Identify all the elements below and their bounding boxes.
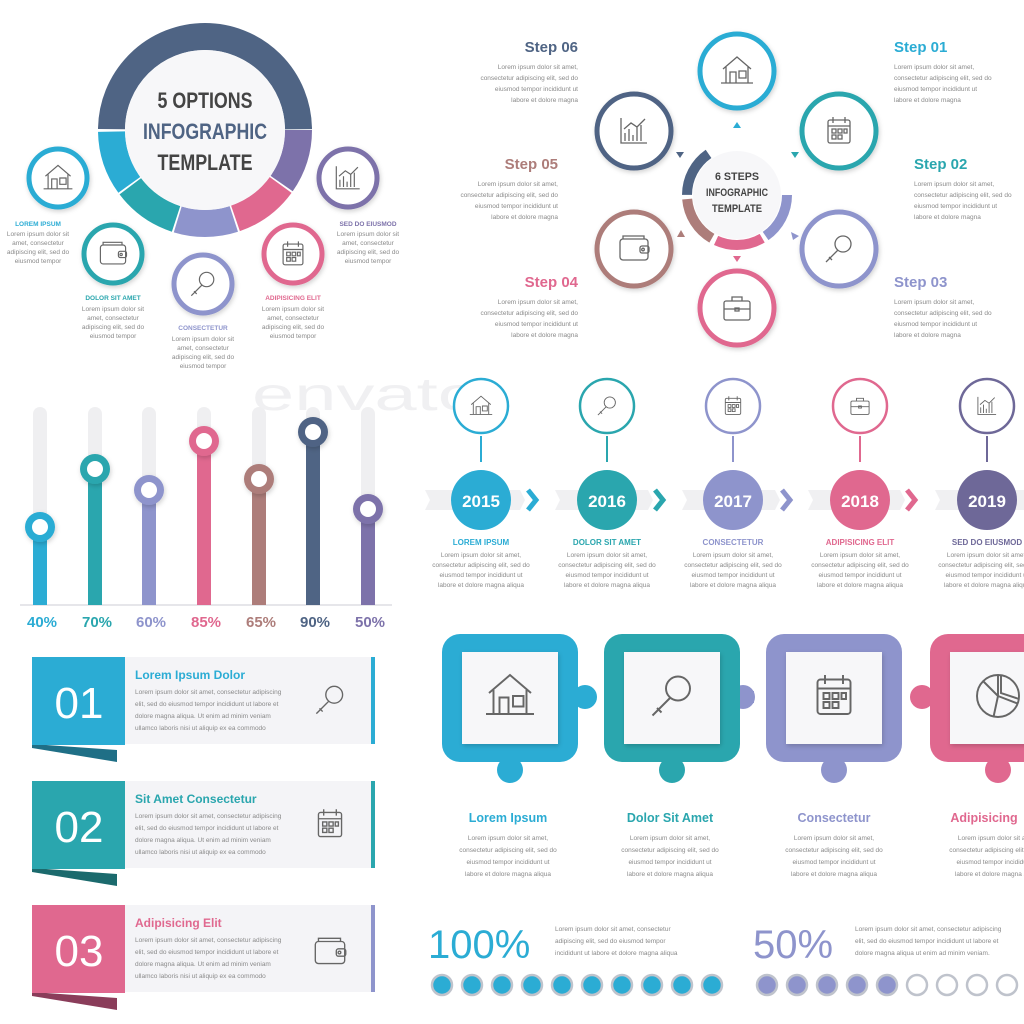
option icons: amet, consectetur	[342, 240, 395, 247]
puzzle pieces: labore et dolore magna aliqua	[465, 871, 551, 878]
banner 02: dolore magna aliqua. Ut enim ad minim veniam	[135, 837, 271, 844]
progress 50%: dolore magna aliqua ut enim ad minim veniam.	[855, 950, 990, 957]
option icons: amet, consectetur	[87, 315, 140, 322]
panel: 6 steps: eiusmod tempor incididunt ut	[495, 321, 578, 328]
puzzle pieces: Lorem Ipsum	[469, 811, 547, 825]
banner 01: ullamco laboris nisi ut aliquip ex ea commodo	[135, 725, 266, 732]
banner 01: Lorem ipsum dolor sit amet, consectetur adipiscing	[135, 689, 282, 696]
panel: 6 steps: TEMPLATE	[712, 203, 762, 215]
panel: 6 steps: Lorem ipsum dolor sit amet,	[894, 64, 974, 71]
puzzle pieces	[442, 634, 1024, 878]
option icons: eiusmod tempor	[270, 333, 317, 340]
timeline: consectetur adipiscing elit, sed do	[811, 562, 909, 569]
banner 03	[32, 905, 375, 1010]
timeline: 2017	[714, 492, 752, 511]
puzzle pieces: Lorem ipsum dolor sit amet,	[630, 835, 710, 842]
panel: 6 steps: consectetur adipiscing elit, sed do	[480, 75, 578, 82]
step texts: Step 04	[525, 274, 579, 291]
option icons: amet, consectetur	[177, 345, 230, 352]
banner 01	[32, 657, 375, 762]
timeline: consectetur adipiscing elit, sed do	[558, 562, 656, 569]
step texts: Step 05	[505, 156, 558, 173]
timeline: Lorem ipsum dolor sit amet,	[693, 552, 773, 559]
step texts: Step 01	[894, 39, 947, 56]
panel: 6 steps: labore et dolore magna	[894, 332, 961, 339]
timeline: Lorem ipsum dolor sit amet,	[567, 552, 647, 559]
timeline: Lorem ipsum dolor sit amet,	[820, 552, 900, 559]
option icons: Lorem ipsum dolor sit	[262, 306, 324, 313]
timeline: SED DO EIUSMOD	[952, 538, 1022, 547]
option icons: SED DO EIUSMOD	[339, 221, 397, 228]
timeline: labore et dolore magna aliqua	[817, 582, 903, 589]
puzzle pieces: eiusmod tempor incididunt ut	[466, 859, 550, 866]
arrows	[676, 122, 799, 262]
panel: 6 steps: eiusmod tempor incididunt ut	[894, 321, 977, 328]
option icons: ADIPISICING ELIT	[265, 295, 321, 302]
panel: 6 steps: labore et dolore magna	[491, 214, 558, 221]
option icons: CONSECTETUR	[178, 325, 228, 332]
panel: 5 options ring	[112, 36, 298, 224]
panel: 6 steps: consectetur adipiscing elit, sed do	[894, 310, 992, 317]
banner 03: Adipisicing Elit	[135, 916, 222, 930]
banner 02: Sit Amet Consectetur	[135, 792, 257, 806]
banner 02: Lorem ipsum dolor sit amet, consectetur adipiscing	[135, 813, 282, 820]
ring title	[143, 88, 267, 175]
puzzle pieces: consectetur adipiscing elit, sed do	[621, 847, 719, 854]
panel: 6 steps: Lorem ipsum dolor sit amet,	[914, 181, 994, 188]
banner 01: dolore magna aliqua. Ut enim ad minim veniam	[135, 713, 271, 720]
option icons: eiusmod tempor	[345, 258, 392, 265]
panel: 6 steps: eiusmod tempor incididunt ut	[894, 86, 977, 93]
panel: 6 steps: 6 STEPS	[715, 171, 759, 183]
timeline: eiusmod tempor incididunt ut	[565, 572, 649, 579]
bar chart: 90%	[300, 614, 330, 631]
panel: 6 steps: consectetur adipiscing elit, sed do	[460, 192, 558, 199]
step texts	[505, 39, 967, 291]
banner 02	[32, 781, 375, 886]
panel: 6 steps: labore et dolore magna	[511, 97, 578, 104]
panel: 6 steps: labore et dolore magna	[914, 214, 981, 221]
option icons: eiusmod tempor	[180, 363, 227, 370]
progress 50%: 50%	[753, 923, 833, 967]
puzzle pieces: Adipisicing	[950, 811, 1018, 825]
banner 02: 02	[55, 803, 103, 852]
banner 03: dolore magna aliqua. Ut enim ad minim veniam	[135, 961, 271, 968]
panel: 6 steps: consectetur adipiscing elit, sed do	[914, 192, 1012, 199]
option icons: eiusmod tempor	[90, 333, 137, 340]
panel: 6 steps: labore et dolore magna	[511, 332, 578, 339]
banner 02: elit, sed do eiusmod tempor incididunt ut labore et	[135, 825, 279, 832]
option icons: adipiscing elit, sed do	[262, 324, 324, 331]
panel: 6 steps: Lorem ipsum dolor sit amet,	[498, 64, 578, 71]
banner 03: Lorem ipsum dolor sit amet, consectetur adipiscing	[135, 937, 282, 944]
option icons: adipiscing elit, sed do	[172, 354, 234, 361]
progress 100%: Lorem ipsum dolor sit amet, consectetur	[555, 926, 671, 933]
timeline: eiusmod tempor incididunt ut	[439, 572, 523, 579]
panel: 6 steps: consectetur adipiscing elit, sed do	[894, 75, 992, 82]
timeline: 2016	[588, 492, 626, 511]
puzzle pieces: eiusmod tempor incididunt ut	[792, 859, 876, 866]
panel: 6 steps: eiusmod tempor incididunt ut	[914, 203, 997, 210]
option icons: adipiscing elit, sed do	[7, 249, 69, 256]
small ring	[687, 145, 787, 245]
numbered banners	[32, 657, 375, 1010]
ring title: INFOGRAPHIC	[143, 119, 267, 144]
panel: 6 steps: eiusmod tempor incididunt ut	[475, 203, 558, 210]
panel: 6 steps: Lorem ipsum dolor sit amet,	[894, 299, 974, 306]
timeline: DOLOR SIT AMET	[573, 538, 641, 547]
timeline: consectetur adipiscing elit, sed do	[432, 562, 530, 569]
bar chart	[20, 407, 392, 631]
step texts: Step 03	[894, 274, 947, 291]
timeline: 2018	[841, 492, 879, 511]
panel: 6 steps: consectetur adipiscing elit, sed do	[480, 310, 578, 317]
bar chart: 65%	[246, 614, 276, 631]
option icons: DOLOR SIT AMET	[85, 295, 141, 302]
timeline	[425, 379, 1024, 589]
option icons: amet, consectetur	[267, 315, 320, 322]
puzzle pieces: Lorem ipsum dolor sit amet,	[794, 835, 874, 842]
banner 03: ullamco laboris nisi ut aliquip ex ea commodo	[135, 973, 266, 980]
step texts: Step 06	[525, 39, 578, 56]
option icons: Lorem ipsum dolor sit	[337, 231, 399, 238]
progress 100%	[428, 923, 722, 995]
bar chart: 70%	[82, 614, 112, 631]
banner 03: 03	[55, 927, 103, 976]
bar chart: 60%	[136, 614, 166, 631]
panel: 6 steps: eiusmod tempor incididunt ut	[495, 86, 578, 93]
option icons	[7, 149, 399, 370]
puzzle pieces: labore et dolore magna aliqua	[791, 871, 877, 878]
bar chart: 50%	[355, 614, 385, 631]
option icons: eiusmod tempor	[15, 258, 62, 265]
option icons: Lorem ipsum dolor sit	[82, 306, 144, 313]
ring title: TEMPLATE	[158, 150, 252, 175]
option icons: adipiscing elit, sed do	[337, 249, 399, 256]
timeline: LOREM IPSUM	[453, 538, 510, 547]
puzzle pieces: Consectetur	[798, 811, 871, 825]
timeline: labore et dolore magna aliqua	[564, 582, 650, 589]
timeline: labore et dolore magna aliqua	[690, 582, 776, 589]
puzzle pieces: consectetur adipiscing elit, sed do	[459, 847, 557, 854]
timeline: eiusmod tempor incididunt ut	[818, 572, 902, 579]
panel: 6 steps: Lorem ipsum dolor sit amet,	[478, 181, 558, 188]
panel: 6 steps: labore et dolore magna	[894, 97, 961, 104]
timeline: CONSECTETUR	[703, 538, 764, 547]
progress 50%	[753, 923, 1017, 995]
banner 01: elit, sed do eiusmod tempor incididunt ut labore et	[135, 701, 279, 708]
timeline: 2019	[968, 492, 1006, 511]
timeline: eiusmod tempor incididunt ut	[691, 572, 775, 579]
timeline: ADIPISICING ELIT	[826, 538, 894, 547]
timeline: Lorem ipsum dolor sit amet,	[441, 552, 521, 559]
ring segments	[112, 36, 298, 224]
timeline: 2015	[462, 492, 500, 511]
option icons: adipiscing elit, sed do	[82, 324, 144, 331]
banner 02: ullamco laboris nisi ut aliquip ex ea commodo	[135, 849, 266, 856]
bar chart: 85%	[191, 614, 221, 631]
option icons: Lorem ipsum dolor sit	[172, 336, 234, 343]
puzzle pieces: Dolor Sit Amet	[627, 811, 714, 825]
option icons: Lorem ipsum dolor sit	[7, 231, 69, 238]
banner 03: elit, sed do eiusmod tempor incididunt ut labore et	[135, 949, 279, 956]
progress 100%: adipiscing elit, sed do eiusmod tempor	[555, 938, 666, 945]
watermark: envato	[252, 368, 480, 420]
progress 100%: 100%	[428, 923, 530, 967]
timeline: consectetur adipiscing elit, sed do	[684, 562, 782, 569]
panel: 6 steps: Lorem ipsum dolor sit amet,	[498, 299, 578, 306]
progress 50%: elit, sed do eiusmod tempor incididunt ut labore et	[855, 938, 999, 945]
option icons: LOREM IPSUM	[15, 221, 61, 228]
puzzle pieces: labore et dolore magna aliqua	[627, 871, 713, 878]
progress 50%: Lorem ipsum dolor sit amet, consectetur adipiscing	[855, 926, 1002, 933]
puzzle pieces: consectetur adipiscing elit, sed do	[785, 847, 883, 854]
ring title: 5 OPTIONS	[158, 88, 252, 113]
banner 01: Lorem Ipsum Dolor	[135, 668, 245, 682]
bar chart: 40%	[27, 614, 57, 631]
timeline: labore et dolore magna aliqua	[438, 582, 524, 589]
step texts: Step 02	[914, 156, 967, 173]
panel: 6 steps: INFOGRAPHIC	[706, 187, 768, 199]
option icons: amet, consectetur	[12, 240, 65, 247]
progress 100%: incididunt ut labore et dolore magna aliqua	[555, 950, 678, 957]
banner 01: 01	[55, 679, 103, 728]
puzzle pieces: Lorem ipsum dolor sit amet,	[468, 835, 548, 842]
puzzle pieces: eiusmod tempor incididunt ut	[628, 859, 712, 866]
panel: 6 steps	[460, 34, 1012, 345]
